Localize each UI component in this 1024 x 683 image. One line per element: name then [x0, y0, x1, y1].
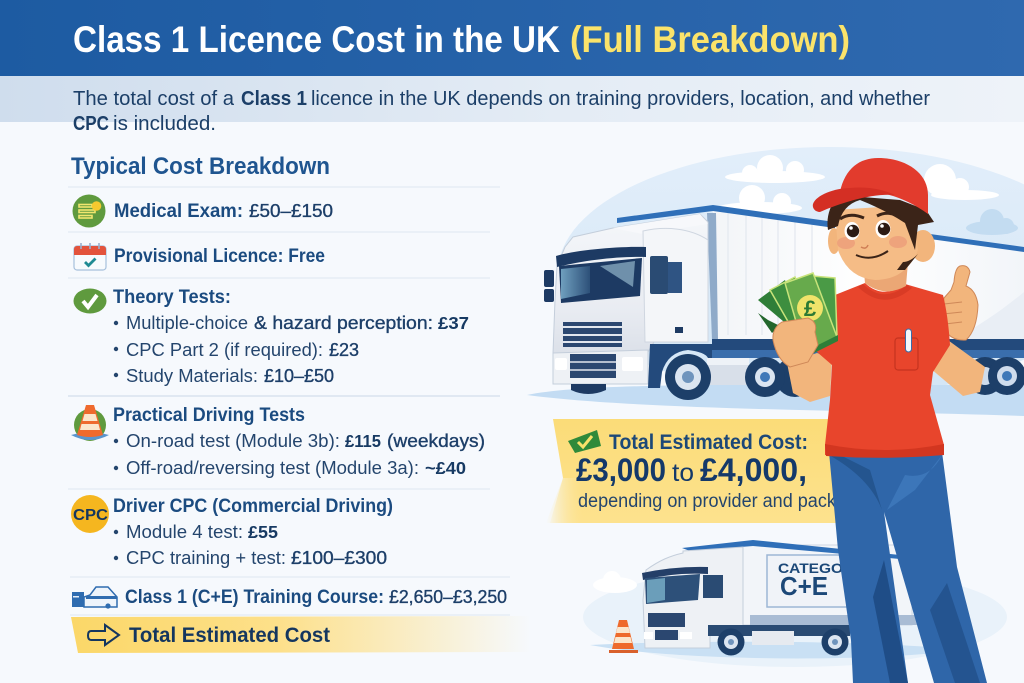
intro text: The total cost of a	[73, 88, 235, 110]
wheels	[707, 357, 1024, 397]
header banner	[0, 0, 1024, 76]
section heading: Typical Cost Breakdown	[71, 153, 330, 180]
label: Class 1 (C+E) Training Course:	[125, 587, 384, 608]
bullet list: £10–£50	[264, 366, 334, 386]
label: Medical Exam:	[114, 201, 243, 222]
label	[114, 201, 333, 222]
bullet list: £37	[438, 313, 469, 333]
callout note: depending on provider and package	[578, 491, 866, 512]
bullet list	[114, 522, 387, 568]
bullet list	[114, 431, 485, 478]
callout amount: £4,000,	[700, 452, 807, 488]
row: provisional licence	[74, 243, 325, 270]
label: Total Estimated Cost	[129, 623, 330, 647]
intro text: CPC	[73, 113, 109, 135]
intro text	[73, 88, 930, 135]
head	[813, 158, 935, 280]
bullet list: & hazard perception:	[254, 313, 433, 333]
icon: calendar	[74, 243, 106, 270]
red cap	[813, 158, 928, 214]
bullet list: £23	[329, 340, 359, 360]
title	[73, 19, 850, 60]
bullet list: On-road test (Module 3b):	[126, 431, 340, 451]
label: £50–£150	[249, 201, 333, 221]
truck sign: C+E	[780, 571, 828, 601]
ground shadow	[527, 385, 1024, 416]
label: £2,650–£3,250	[389, 587, 507, 607]
heading: Practical Driving Tests	[113, 405, 305, 426]
row: medical exam	[72, 194, 333, 228]
bullet list: CPC Part 2 (if required):	[126, 340, 323, 360]
pound sign: £	[804, 296, 817, 321]
truck sign	[778, 560, 865, 601]
truck sign: CATEGORY	[778, 560, 865, 576]
heading: Theory Tests:	[113, 287, 231, 308]
illustration: sky and clouds	[558, 147, 1024, 397]
illustration: driver with cash	[758, 158, 987, 683]
row: theory tests	[74, 287, 469, 386]
bullet list: CPC training + test:	[126, 548, 286, 568]
illustration: small truck	[583, 540, 1007, 667]
label: Provisional Licence: Free	[114, 246, 325, 267]
icon: traffic cone	[71, 405, 109, 441]
left arm and hand	[787, 353, 832, 402]
title: (Full Breakdown)	[570, 19, 850, 60]
title: Class 1 Licence Cost in the UK	[73, 19, 560, 60]
row: driver cpc	[71, 495, 393, 568]
callout: total estimated cost	[546, 419, 866, 523]
icon: traffic cone	[609, 620, 638, 653]
bullet list: Off-road/reversing test (Module 3a):	[126, 458, 419, 478]
cab	[642, 547, 850, 648]
row: training course	[72, 587, 507, 609]
bullet list	[114, 313, 469, 386]
icon: cpc badge	[71, 495, 109, 533]
intro text: Class 1	[241, 88, 307, 110]
intro text: licence in the UK depends on training providers, location, and whether	[311, 88, 930, 110]
bullet list: Module 4 test:	[126, 522, 243, 542]
heading: Driver CPC (Commercial Driving)	[113, 496, 393, 517]
red t-shirt	[817, 283, 950, 458]
bullet list: ~£40	[425, 458, 466, 478]
banknotes	[758, 273, 838, 357]
bullet list: Multiple-choice	[126, 313, 248, 333]
intro text: is included.	[113, 113, 216, 135]
intro band	[0, 76, 1024, 135]
icon: arrow	[88, 625, 119, 645]
bullet list: £100–£300	[291, 548, 387, 568]
trailer	[617, 205, 1024, 358]
icon: green cash check	[568, 430, 601, 453]
illustration: large truck	[544, 205, 1024, 400]
icon: check badge	[74, 288, 106, 314]
bullet list: £55	[248, 522, 278, 542]
trailer	[682, 540, 925, 625]
total estimated cost bar	[71, 616, 530, 653]
bullet list: (weekdays)	[387, 431, 485, 451]
panel: typical cost breakdown	[68, 153, 530, 653]
jeans	[829, 452, 987, 683]
cab	[544, 214, 712, 400]
icon: medical form	[72, 194, 106, 228]
row: practical driving tests	[71, 405, 485, 478]
bullet list: £115	[345, 431, 381, 451]
face	[837, 213, 907, 258]
bullet list: Study Materials:	[126, 366, 258, 386]
icon: cpc badge: CPC	[73, 507, 108, 524]
callout amount: to	[672, 459, 694, 487]
right arm and thumbs up	[930, 266, 985, 396]
left hand fingers	[773, 318, 818, 367]
callout amount: £3,000	[576, 452, 666, 488]
icon: training vehicle	[72, 587, 117, 609]
neck	[863, 262, 908, 291]
callout amount	[576, 452, 807, 488]
wheels	[718, 628, 848, 656]
callout heading: Total Estimated Cost:	[609, 431, 808, 454]
